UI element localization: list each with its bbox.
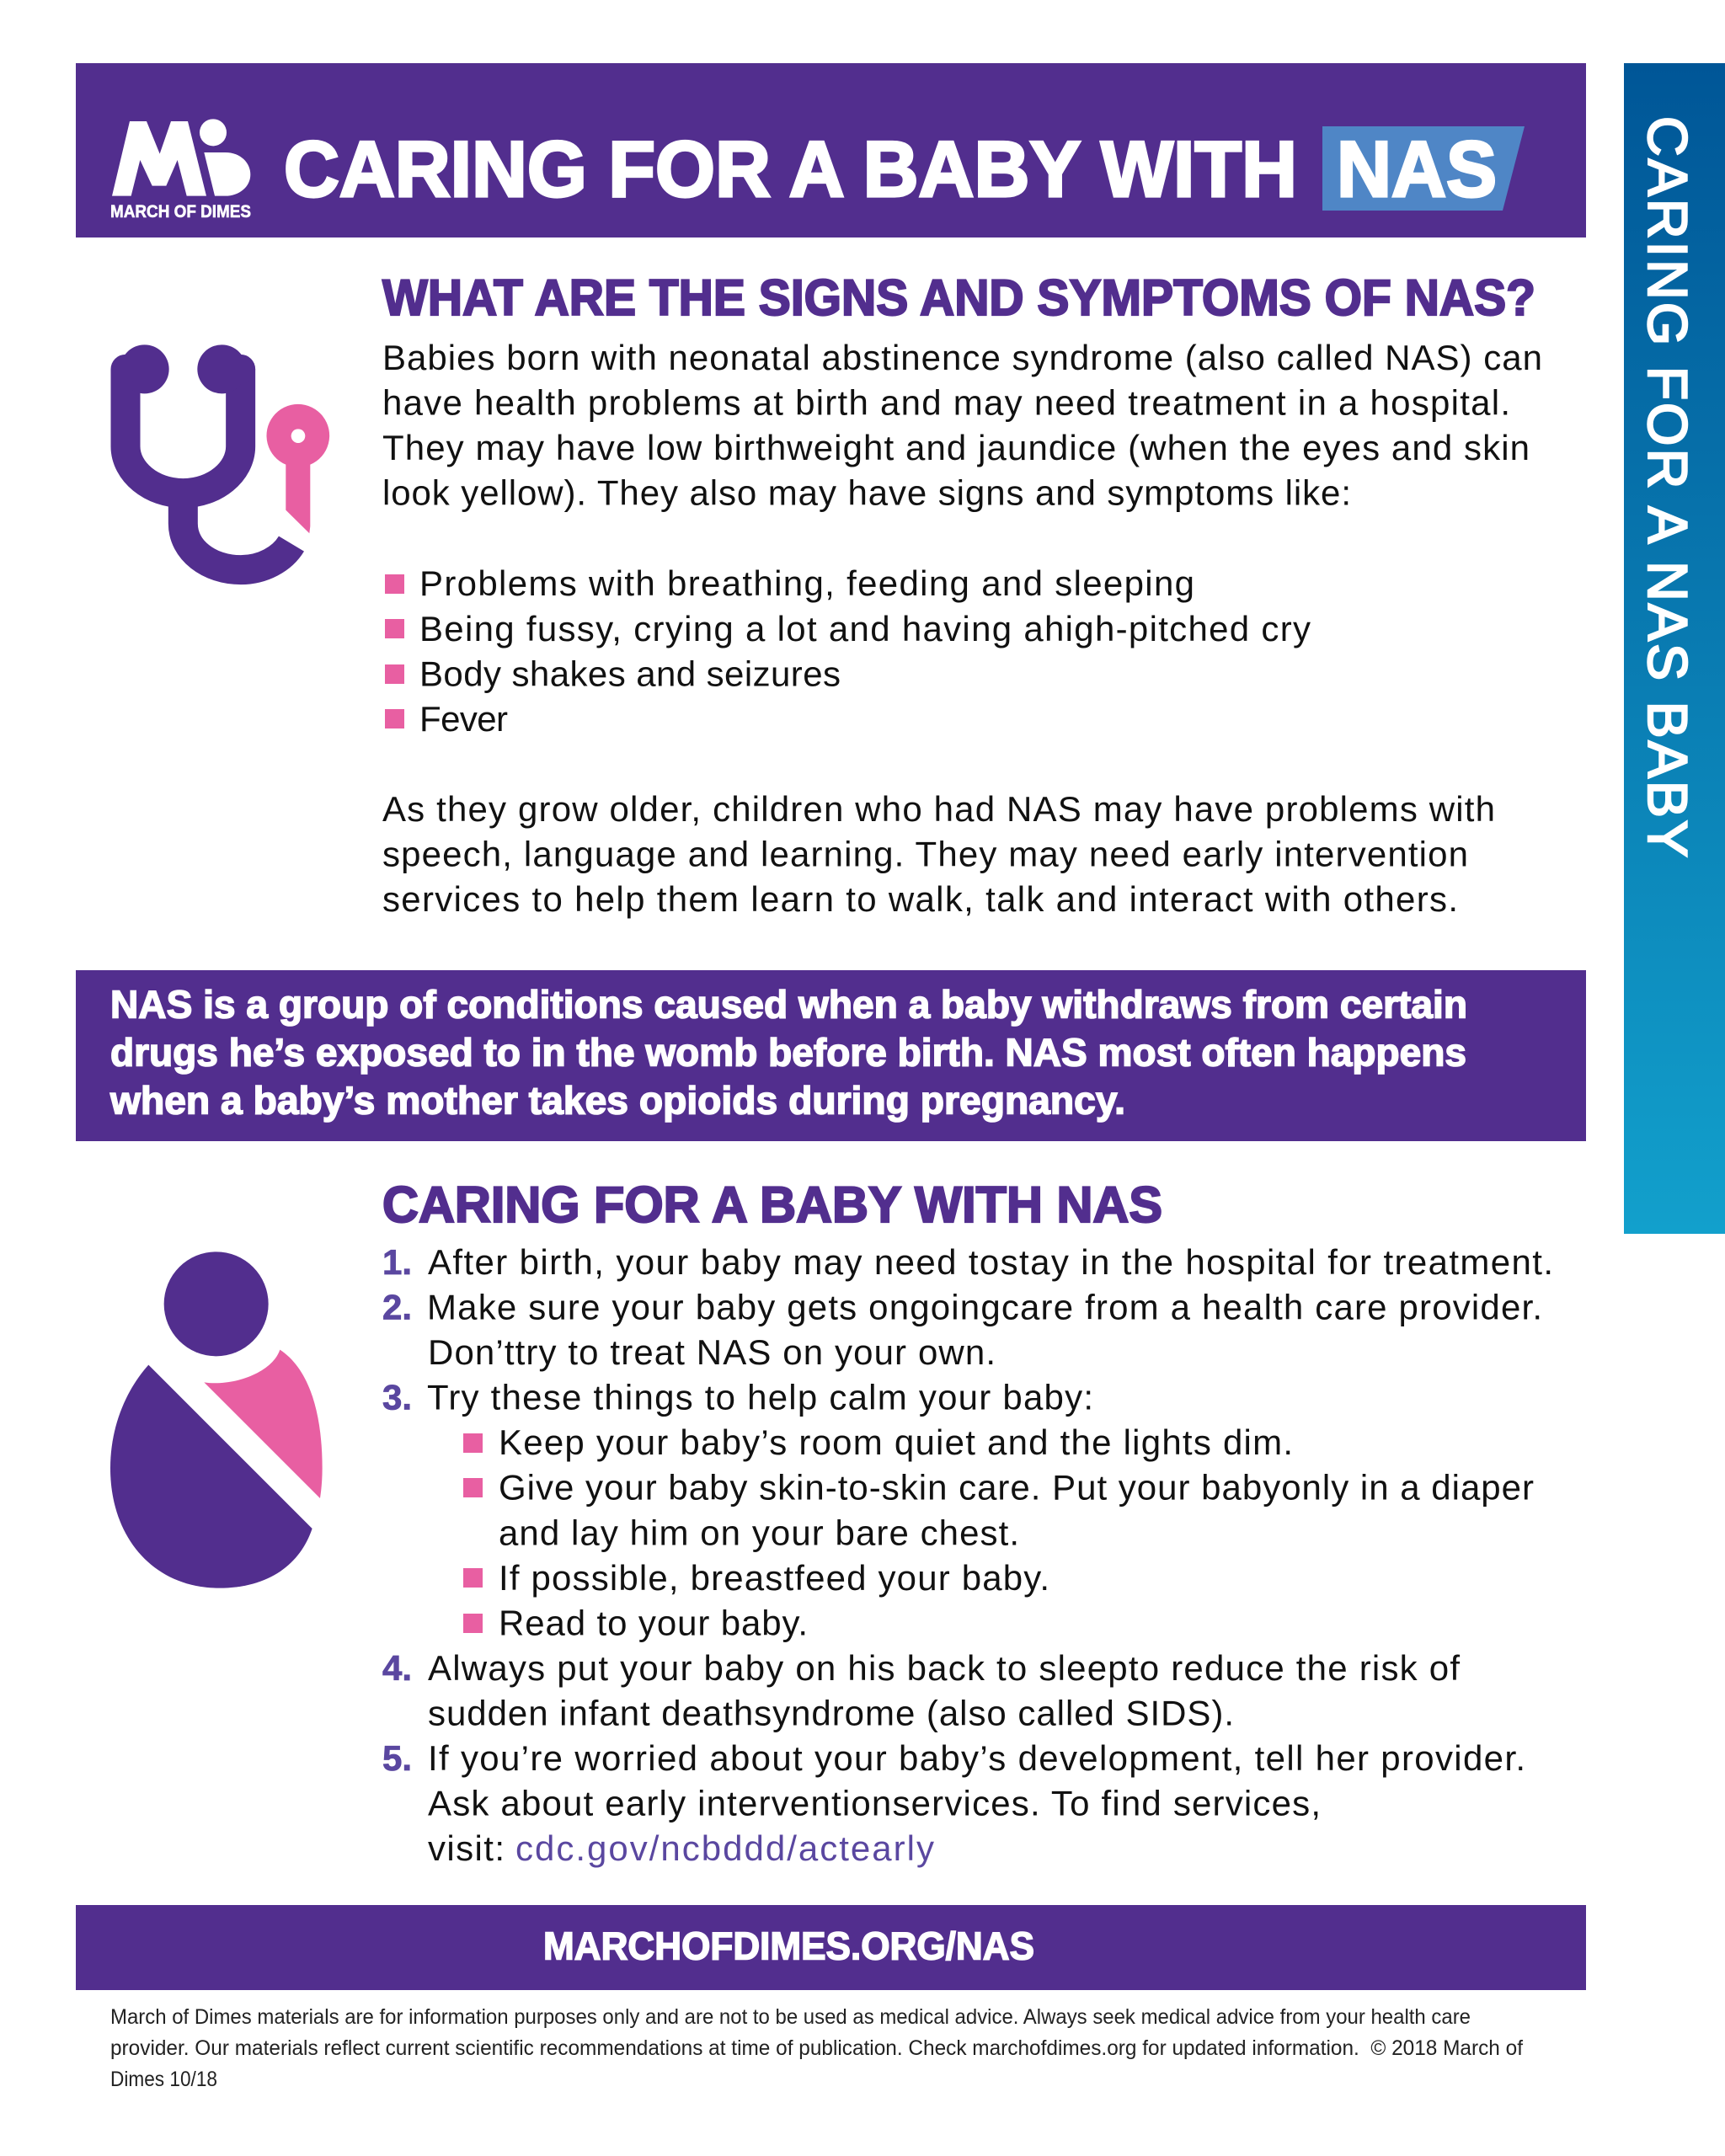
list: care steps: Ask about early interventionservices. To find services, [428, 1784, 1321, 1823]
panel: definition banner: when a baby’s mother takes opioids during pregnancy. [109, 1078, 1125, 1122]
list: care steps: Make sure your baby gets ongoingcare from a health care provider. [427, 1287, 1542, 1327]
heading: caring for a baby: CARING FOR A BABY WITH NAS [382, 1177, 1162, 1233]
title highlight: NAS: NAS [1337, 125, 1497, 213]
list: care steps: 1. [382, 1242, 412, 1282]
panel: definition banner: drugs he’s exposed to in the womb before birth. NAS most often happens [110, 1031, 1466, 1075]
list: care steps: 3. [382, 1378, 412, 1417]
text block: intro [382, 338, 1542, 512]
text block: intro: look yellow). They also may have signs and symptoms like: [382, 473, 1351, 512]
list: care steps: sudden infant deathsyndrome (also called SIDS). [428, 1693, 1234, 1733]
list: care steps: and lay him on your bare chest. [499, 1513, 1019, 1552]
list: care steps: 4. [382, 1648, 412, 1688]
list: symptoms: Problems with breathing, feeding and sleeping [419, 563, 1194, 603]
list: care steps: Try these things to help calm your baby: [427, 1378, 1093, 1417]
list: symptoms: Body shakes and seizures [419, 654, 841, 693]
list: care steps: After birth, your baby may need tostay in the hospital for treatment. [428, 1242, 1553, 1282]
list: care steps: 2. [382, 1287, 412, 1327]
text block: disclaimer: Dimes 10/18 [110, 2068, 217, 2091]
text block: older children: services to help them learn to walk, talk and interact with others. [382, 879, 1458, 919]
text block: older children [382, 789, 1495, 919]
list: care steps: Give your baby skin-to-skin care. Put your babyonly in a diaper [499, 1468, 1534, 1508]
text block: older children: As they grow older, children who had NAS may have problems with [382, 789, 1495, 829]
logo: March of Dimes: MARCH OF DIMES [110, 202, 251, 221]
heading: signs and symptoms: WHAT ARE THE SIGNS AND SYMPTOMS OF NAS? [382, 270, 1535, 326]
panel: website footer bar [76, 1905, 1586, 1990]
list: symptoms: Being fussy, crying a lot and having ahigh-pitched cry [419, 609, 1311, 648]
panel: page header [76, 63, 1586, 237]
icon: swaddled baby [110, 1251, 323, 1588]
list: care steps: 5. [382, 1738, 412, 1778]
icon: stethoscope [110, 344, 329, 570]
list: care steps: If possible, breastfeed your baby. [499, 1558, 1049, 1598]
list: care steps [382, 1242, 1553, 1868]
list: symptoms [385, 563, 1311, 739]
panel: website footer bar: MARCHOFDIMES.ORG/NAS [543, 1924, 1034, 1967]
panel: side tab [1624, 63, 1725, 1234]
list: care steps: visit: [428, 1828, 505, 1868]
text block: disclaimer: March of Dimes materials are for information purposes only and are not to be used as medical advice. Always seek medical advice from your health care [110, 2005, 1471, 2029]
text block: disclaimer [110, 2005, 1523, 2091]
text block: intro: Babies born with neonatal abstinence syndrome (also called NAS) can [382, 338, 1542, 377]
list: care steps: If you’re worried about your baby’s development, tell her provider. [428, 1738, 1525, 1778]
title: CARING FOR A BABY WITH [284, 125, 1297, 213]
list: care steps: Keep your baby’s room quiet and the lights dim. [499, 1422, 1293, 1462]
logo: March of Dimes [110, 119, 251, 221]
text block: older children: speech, language and learning. They may need early intervention [382, 834, 1468, 873]
list: symptoms: Fever [419, 699, 508, 739]
link: CDC early intervention: cdc.gov/ncbddd/actearly [515, 1828, 934, 1868]
list: care steps: Read to your baby. [499, 1603, 808, 1642]
list: care steps: Don’ttry to treat NAS on your own. [428, 1332, 996, 1372]
side tab label: CARING FOR A NAS BABY [1637, 116, 1699, 857]
list: care steps: Always put your baby on his back to sleepto reduce the risk of [428, 1648, 1460, 1688]
text block: disclaimer: provider. Our materials reflect current scientific recommendations at time of publication. Check marchofdimes.org for updated information. © 2018 March of [110, 2036, 1523, 2060]
text block: intro: have health problems at birth and may need treatment in a hospital. [382, 383, 1510, 423]
panel: definition banner: NAS is a group of conditions caused when a baby withdraws from certain [110, 982, 1467, 1026]
panel: definition banner [76, 970, 1586, 1141]
text block: intro: They may have low birthweight and jaundice (when the eyes and skin [382, 428, 1530, 467]
